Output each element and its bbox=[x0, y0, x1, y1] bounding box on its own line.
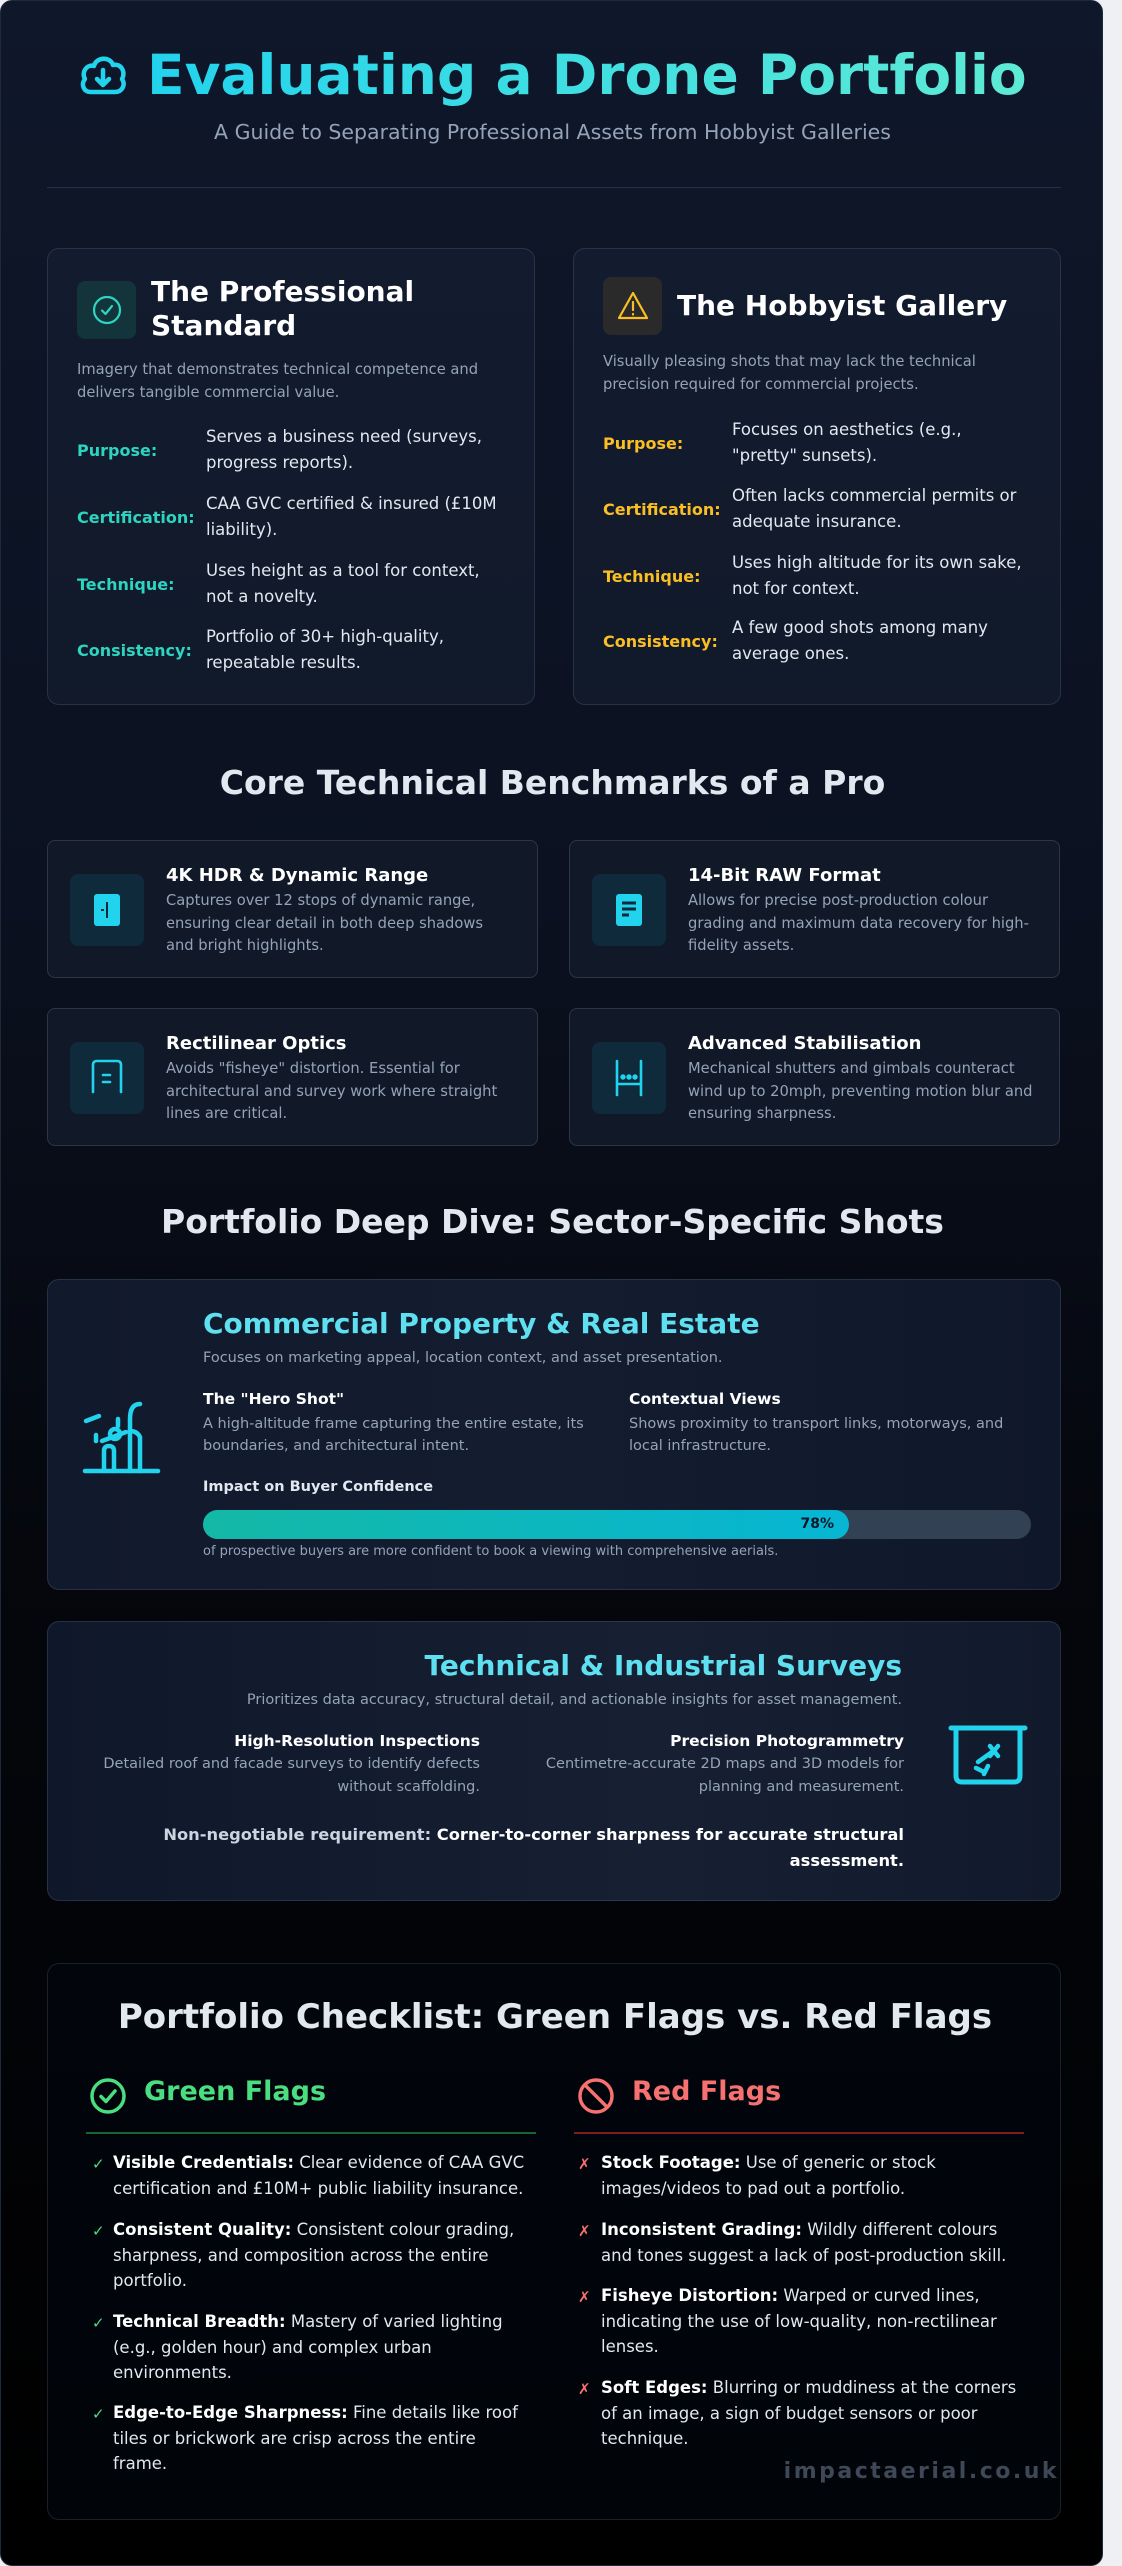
description: Visually pleasing shots that may lack the technical precision required for commercial projects. bbox=[603, 353, 976, 393]
green header: Green Flags bbox=[144, 2076, 326, 2107]
green header bbox=[86, 2074, 536, 2134]
panel: hobbyist gallery bbox=[573, 248, 1061, 705]
sub: contextual views: Shows proximity to transport links, motorways, and local infrastructure. bbox=[629, 1416, 1003, 1454]
benchmark: RAW: 14-Bit RAW Format bbox=[688, 865, 881, 886]
icon: warning bbox=[603, 277, 662, 335]
rows: Certification: bbox=[77, 508, 195, 526]
benchmark: stabilisation: Advanced Stabilisation bbox=[688, 1033, 921, 1054]
red items: ✗ bbox=[578, 2288, 591, 2306]
bar chart: buyer confidence: of prospective buyers are more confident to book a viewing with comprehensive aerials. bbox=[203, 1544, 778, 1559]
panel: commercial property bbox=[47, 1279, 1061, 1590]
column: green flags bbox=[86, 2076, 536, 2473]
green items: Visible Credentials: Clear evidence of CAA GVC certification and £10M+ public liability insurance. bbox=[113, 2153, 524, 2198]
green items: Technical Breadth: Mastery of varied lighting (e.g., golden hour) and complex urban environments. bbox=[113, 2312, 503, 2382]
heading: core benchmarks: Core Technical Benchmarks of a Pro bbox=[220, 763, 885, 802]
red items: Stock Footage: Use of generic or stock images/videos to pad out a portfolio. bbox=[601, 2153, 936, 2198]
bar chart: buyer confidence bbox=[203, 1479, 1031, 1559]
bar chart: buyer confidence: 78% bbox=[800, 1516, 834, 1532]
red items: Soft Edges: Blurring or muddiness at the corners of an image, a sign of budget sensors or poor technique. bbox=[601, 2378, 1016, 2448]
icon: survey bucket bbox=[948, 1726, 1028, 1784]
green items bbox=[92, 2153, 524, 2473]
rows bbox=[603, 420, 1022, 663]
rows: Uses height as a tool for context, not a novelty. bbox=[206, 561, 480, 606]
green items: Edge-to-Edge Sharpness: Fine details like roof tiles or brickwork are crisp across the entire frame. bbox=[113, 2403, 518, 2473]
benchmark: RAW: Allows for precise post-production colour grading and maximum data recovery for high-fidelity assets. bbox=[688, 892, 1029, 954]
header icon: cloud download bbox=[80, 56, 126, 94]
red items: Fisheye Distortion: Warped or curved lines, indicating the use of low-quality, non-rectilinear lenses. bbox=[601, 2286, 997, 2356]
icon bbox=[592, 874, 666, 946]
rows: Technique: bbox=[603, 566, 700, 586]
rows: Certification: bbox=[603, 500, 721, 518]
green items: ✓ bbox=[92, 2314, 105, 2332]
column: red flags bbox=[574, 2076, 1024, 2448]
sub: photogrammetry bbox=[546, 1732, 904, 1795]
benchmark: stabilisation: Mechanical shutters and gimbals counteract wind up to 20mph, preventing motion blur and ensuring sharpness. bbox=[688, 1060, 1032, 1122]
callout: requirement: Non-negotiable requirement: Corner-to-corner sharpness for accurate structural assessment. bbox=[163, 1825, 904, 1870]
red items: ✗ bbox=[578, 2155, 591, 2173]
heading: Standard bbox=[151, 309, 296, 342]
benchmark: optics: Rectilinear Optics bbox=[166, 1033, 347, 1054]
red header bbox=[574, 2074, 1024, 2134]
icon bbox=[70, 874, 144, 946]
sub: hero shot: The "Hero Shot" bbox=[203, 1390, 344, 1408]
rows: CAA GVC certified & insured (£10M liability). bbox=[206, 494, 497, 539]
sub: photogrammetry: Precision Photogrammetry bbox=[670, 1732, 904, 1750]
sub: photogrammetry: Centimetre-accurate 2D maps and 3D models for planning and measurement. bbox=[546, 1756, 904, 1795]
benchmark: 4K HDR: 4K HDR & Dynamic Range bbox=[166, 865, 428, 886]
heading: deep dive: Portfolio Deep Dive: Sector-Specific Shots bbox=[161, 1202, 944, 1241]
icon bbox=[592, 1042, 666, 1114]
heading: Technical & Industrial Surveys bbox=[424, 1649, 902, 1682]
rows: Serves a business need (surveys, progress reports). bbox=[206, 427, 482, 472]
rows: Portfolio of 30+ high-quality, repeatable results. bbox=[206, 627, 444, 672]
rows: Purpose: bbox=[603, 434, 683, 452]
benchmark: RAW bbox=[569, 840, 1060, 978]
panel: checklist bbox=[47, 1963, 1061, 2520]
benchmark: stabilisation bbox=[569, 1008, 1060, 1146]
bar chart: buyer confidence: Impact on Buyer Confidence bbox=[203, 1479, 433, 1495]
sub: contextual views: Contextual Views bbox=[629, 1390, 781, 1408]
footer: watermark: impactaerial.co.uk bbox=[784, 2459, 1059, 2484]
green items: ✓ bbox=[92, 2155, 105, 2173]
icon: check circle bbox=[77, 281, 136, 339]
red items: ✗ bbox=[578, 2222, 591, 2240]
heading: Portfolio Checklist: Green Flags vs. Red Flags bbox=[118, 1997, 992, 2037]
description: Focuses on marketing appeal, location context, and asset presentation. bbox=[203, 1350, 723, 1366]
sub: inspections: High-Resolution Inspections bbox=[234, 1732, 480, 1750]
benchmark: 4K HDR bbox=[47, 840, 538, 978]
description: Prioritizes data accuracy, structural detail, and actionable insights for asset management. bbox=[247, 1692, 902, 1708]
rows: Technique: bbox=[77, 574, 174, 594]
sub: contextual views bbox=[629, 1390, 1003, 1454]
heading bbox=[151, 275, 414, 342]
green items: ✓ bbox=[92, 2405, 105, 2423]
sub: hero shot bbox=[203, 1390, 584, 1454]
rows: Consistency: bbox=[77, 640, 192, 660]
rows: Consistency: bbox=[603, 632, 718, 650]
rows: Often lacks commercial permits or adequate insurance. bbox=[732, 486, 1016, 531]
icon: buildings bbox=[82, 1402, 160, 1474]
rows: Purpose: bbox=[77, 440, 157, 460]
benchmark: optics: Avoids "fisheye" distortion. Essential for architectural and survey work where straight lines are critical. bbox=[166, 1060, 497, 1122]
sub: inspections: Detailed roof and facade surveys to identify defects without scaffolding. bbox=[103, 1756, 480, 1795]
rows: A few good shots among many average ones. bbox=[732, 618, 988, 663]
benchmark: optics bbox=[47, 1008, 538, 1146]
red items: Inconsistent Grading: Wildly different colours and tones suggest a lack of post-production skill. bbox=[601, 2220, 1006, 2264]
sub: hero shot: A high-altitude frame capturing the entire estate, its boundaries, and architectural intent. bbox=[203, 1416, 584, 1454]
green items: ✓ bbox=[92, 2222, 105, 2240]
rows bbox=[77, 427, 497, 672]
sub: inspections bbox=[103, 1732, 480, 1795]
heading: The Hobbyist Gallery bbox=[677, 289, 1007, 322]
title: Evaluating a Drone Portfolio bbox=[147, 43, 1027, 107]
description: Imagery that demonstrates technical competence and delivers tangible commercial value. bbox=[77, 361, 478, 401]
subtitle: A Guide to Separating Professional Assets from Hobbyist Galleries bbox=[214, 120, 891, 144]
rows: Focuses on aesthetics (e.g., "pretty" sunsets). bbox=[732, 420, 962, 465]
heading: Commercial Property & Real Estate bbox=[203, 1307, 760, 1340]
red items bbox=[578, 2153, 1016, 2448]
green items: Consistent Quality: Consistent colour grading, sharpness, and composition across the entire portfolio. bbox=[113, 2220, 514, 2290]
heading: The Professional bbox=[151, 275, 414, 308]
icon bbox=[70, 1042, 144, 1114]
panel: professional standard bbox=[47, 248, 535, 705]
red items: ✗ bbox=[578, 2380, 591, 2398]
benchmark: 4K HDR: Captures over 12 stops of dynamic range, ensuring clear detail in both deep shadows and bright highlights. bbox=[166, 892, 483, 954]
rows: Uses high altitude for its own sake, not for context. bbox=[732, 553, 1022, 598]
panel: technical surveys bbox=[47, 1621, 1061, 1901]
red header: Red Flags bbox=[632, 2076, 781, 2107]
